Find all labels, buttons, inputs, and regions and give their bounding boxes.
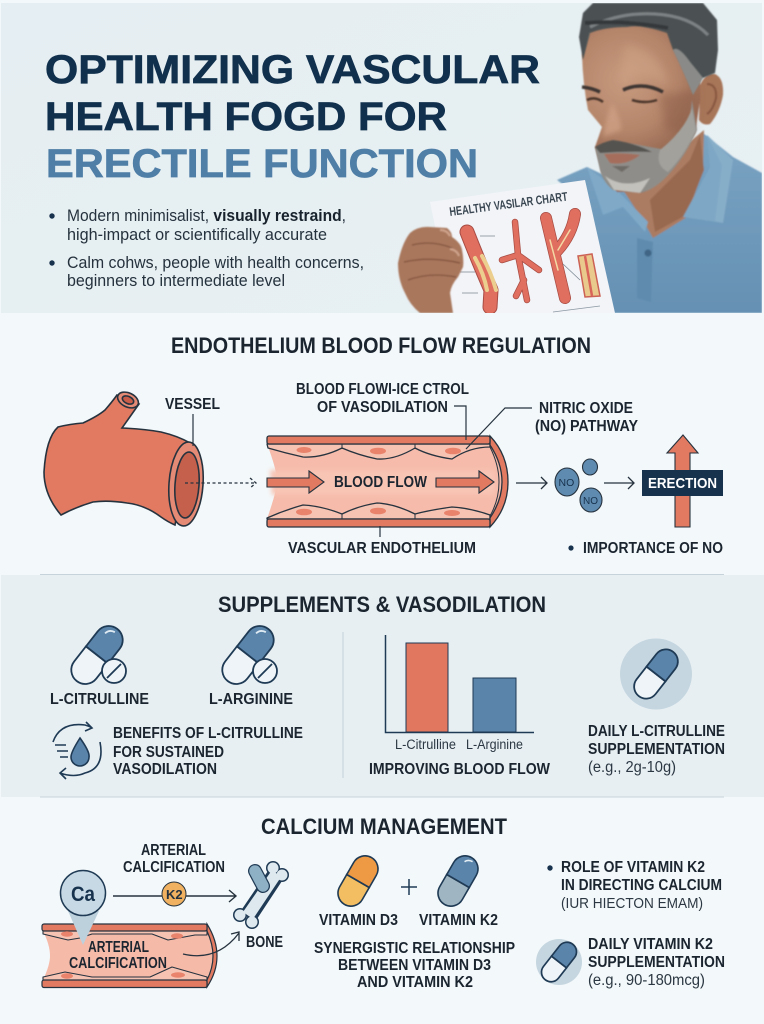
hand bbox=[398, 227, 463, 313]
panel: supplements and vasodilation bbox=[1, 574, 764, 797]
calcified artery bbox=[42, 924, 217, 988]
bar chart: L-Citrulline bbox=[395, 737, 456, 752]
calcium marker bbox=[60, 870, 106, 945]
heading: ENDOTHELIUM BLOOD FLOW REGULATION bbox=[171, 333, 591, 358]
panel: header bbox=[1, 3, 762, 313]
heading: CALCIUM MANAGEMENT bbox=[261, 814, 508, 839]
curved arrow to bone bbox=[183, 932, 239, 956]
label: nitric oxide pathway bbox=[466, 400, 639, 449]
benefits text: VASODILATION bbox=[113, 761, 217, 778]
NO molecules bbox=[555, 459, 602, 512]
daily vitamin K2 text: SUPPLEMENTATION bbox=[588, 954, 725, 971]
icon: daily vitamin K2 pill bbox=[536, 938, 582, 986]
synergy text bbox=[314, 940, 515, 991]
label: nitric oxide pathway: (NO) PATHWAY bbox=[535, 418, 639, 435]
title: OPTIMIZING VASCULAR bbox=[45, 48, 540, 92]
icon: vitamin K2 capsule bbox=[433, 851, 483, 911]
importance of NO: IMPORTANCE OF NO bbox=[583, 540, 723, 557]
icon: daily l-citrulline pill bbox=[620, 638, 692, 710]
blood flow arrows bbox=[267, 471, 494, 493]
vitamin labels: VITAMIN D3 bbox=[319, 912, 398, 929]
header bullet list bbox=[49, 207, 364, 290]
calcified artery: ARTERIAL bbox=[88, 939, 149, 956]
calcified artery: CALCIFICATION bbox=[69, 955, 167, 972]
plus bbox=[401, 879, 417, 895]
role of vitamin K2 bbox=[547, 859, 722, 912]
vessel label: VESSEL bbox=[165, 396, 220, 413]
arterial calcification label: ARTERIAL bbox=[141, 842, 206, 859]
vessel label bbox=[165, 396, 220, 446]
daily vitamin K2 text: (e.g., 90-180mcg) bbox=[588, 972, 705, 989]
held chart paper: HEALTHY VASILAR CHART bbox=[449, 190, 569, 219]
panel: endothelium blood flow regulation bbox=[44, 333, 723, 557]
bar chart bbox=[369, 635, 550, 778]
pill labels: L-CITRULLINE bbox=[50, 691, 149, 708]
erection arrow and label: ERECTION bbox=[648, 475, 717, 492]
header bullet list: Modern minimisalist, visually restraind, bbox=[67, 207, 346, 225]
man holding vascular chart bbox=[398, 3, 762, 313]
label: vascular endothelium: VASCULAR ENDOTHELIUM bbox=[288, 540, 476, 557]
heading: SUPPLEMENTS & VASODILATION bbox=[218, 592, 546, 617]
daily l-citrulline text bbox=[588, 723, 725, 776]
title bbox=[45, 48, 540, 186]
pill labels bbox=[50, 691, 293, 708]
arterial calcification label: CALCIFICATION bbox=[123, 859, 225, 876]
arrow: K2 directs calcium to bone: K2 bbox=[166, 887, 183, 902]
daily vitamin K2 text bbox=[588, 936, 725, 989]
arrow: K2 directs calcium to bone bbox=[113, 882, 236, 906]
benefits text: BENEFITS OF L-CITRULLINE bbox=[113, 725, 303, 742]
arrow to NO bbox=[516, 477, 547, 489]
daily l-citrulline text: (e.g., 2g-10g) bbox=[588, 759, 676, 776]
held chart paper bbox=[430, 180, 615, 313]
vitamin labels bbox=[319, 912, 498, 929]
NO molecules: NO bbox=[583, 496, 598, 507]
synergy text: BETWEEN VITAMIN D3 bbox=[338, 957, 491, 974]
header bullet list: Calm cohws, people with health concerns, bbox=[67, 254, 364, 272]
icon: water drop cycle bbox=[53, 722, 101, 779]
label: control of vasodilation: OF VASODILATION bbox=[317, 399, 448, 416]
panel: calcium management bbox=[42, 814, 725, 991]
icon: bone bbox=[233, 861, 289, 929]
label: nitric oxide pathway: NITRIC OXIDE bbox=[539, 400, 633, 417]
daily l-citrulline text: DAILY L-CITRULLINE bbox=[588, 723, 725, 740]
header bullet list: beginners to intermediate level bbox=[67, 272, 285, 290]
pill labels: L-ARGININE bbox=[209, 691, 293, 708]
arrow to erection bbox=[604, 477, 634, 489]
bar chart: L-Arginine bbox=[466, 737, 523, 752]
bone label: BONE bbox=[246, 934, 283, 951]
daily vitamin K2 text: DAILY VITAMIN K2 bbox=[588, 936, 713, 953]
header bullet list: high-impact or scientifically accurate bbox=[67, 226, 327, 244]
benefits text bbox=[113, 725, 303, 778]
role of vitamin K2: ROLE OF VITAMIN K2 bbox=[561, 859, 705, 876]
bar chart: IMPROVING BLOOD FLOW bbox=[369, 761, 550, 778]
synergy text: SYNERGISTIC RELATIONSHIP bbox=[314, 940, 515, 957]
arterial calcification label bbox=[123, 842, 225, 876]
icon: vitamin D3 capsule bbox=[333, 851, 383, 911]
role of vitamin K2: (IUR HIECTON EMAM) bbox=[561, 895, 703, 912]
vitamin labels: VITAMIN K2 bbox=[419, 912, 498, 929]
label: control of vasodilation bbox=[296, 381, 469, 440]
erection arrow and label bbox=[642, 435, 723, 527]
icon: l-citrulline pill bbox=[66, 620, 128, 690]
blood flow label: BLOOD FLOW bbox=[334, 474, 427, 491]
label: control of vasodilation: BLOOD FLOWI-ICE CTROL bbox=[296, 381, 469, 398]
benefits text: FOR SUSTAINED bbox=[113, 744, 224, 761]
daily l-citrulline text: SUPPLEMENTATION bbox=[588, 741, 725, 758]
calcium marker: Ca bbox=[71, 883, 95, 906]
role of vitamin K2: IN DIRECTING CALCIUM bbox=[561, 877, 722, 894]
title: HEALTH FOGD FOR bbox=[45, 95, 447, 139]
NO molecules: NO bbox=[558, 477, 574, 489]
icon: large vessel bbox=[44, 389, 206, 527]
synergy text: AND VITAMIN K2 bbox=[357, 974, 473, 991]
title: ERECTILE FUNCTION bbox=[46, 142, 478, 186]
blood vessel cross-section bbox=[267, 436, 508, 527]
icon: l-arginine pill bbox=[217, 620, 279, 690]
dotted arrow bbox=[185, 478, 256, 488]
